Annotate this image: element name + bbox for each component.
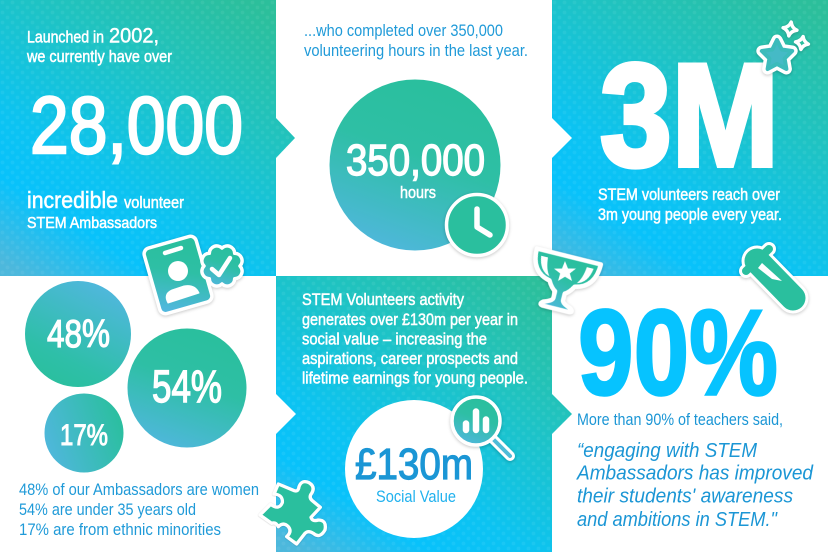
text: volunteering hours: [304, 22, 528, 60]
circle: 350,000 hours: [330, 80, 500, 250]
text: social value description: generates over £130m per year in: [302, 311, 518, 329]
icon: ID card with check badge: [143, 235, 242, 315]
panel background with arrow: [0, 0, 295, 276]
text: STEM volunteers reach: 3m young people every year.: [598, 206, 782, 224]
text: incredible volunteer STEM Ambassadors: STEM Ambassadors: [27, 215, 157, 232]
panel: social value: [260, 276, 572, 552]
text: incredible volunteer STEM Ambassadors: [27, 187, 184, 232]
panel background with notch: [552, 0, 828, 276]
big number: 28,000: 28,000: [30, 81, 243, 171]
panel: 3M young people: [552, 0, 828, 276]
quote: “engaging with STEM: [577, 439, 758, 462]
text: demographics list: 17% are from ethnic minorities: [19, 521, 221, 539]
text: incredible volunteer STEM Ambassadors: volunteer: [124, 194, 184, 212]
circle: £130m social value: £130m: [355, 440, 473, 489]
sparkle two: [794, 35, 810, 51]
panel background with arrow and notch: [276, 276, 572, 552]
circle: 48%: 48%: [47, 313, 110, 356]
panel: ambassador demographics: [19, 281, 259, 539]
heading: launched in 2002: 2002,: [109, 24, 159, 48]
text: social value description: lifetime earnings for young people.: [302, 370, 528, 388]
panel: volunteering hours: [304, 22, 528, 256]
quote: Ambassadors has improved: [575, 462, 814, 484]
circle: 54%: 54%: [152, 361, 222, 412]
text: social value description: [302, 291, 528, 388]
text: social value description: aspirations, career prospects and: [302, 350, 518, 368]
quote: [575, 439, 814, 531]
card: [143, 235, 213, 315]
text: more than 90% of teachers: More than 90% of teachers said,: [577, 410, 783, 429]
text: demographics list: 48% of our Ambassadors are women: [19, 481, 259, 499]
heading: launched in 2002: [26, 24, 172, 66]
circle: 54%: [128, 328, 246, 448]
panel: teachers 90%: [575, 249, 814, 531]
sparkle one: [782, 21, 798, 37]
quote: and ambitions in STEM.": [577, 508, 779, 531]
big number: 3M: 3M: [600, 34, 779, 196]
text: STEM volunteers reach: [598, 186, 782, 224]
text: STEM volunteers reach: STEM volunteers reach over: [598, 186, 780, 204]
text: incredible volunteer STEM Ambassadors: incredible: [27, 187, 118, 213]
badge: [202, 246, 242, 286]
circle: 17%: 17%: [60, 419, 108, 452]
text: volunteering hours: volunteering hours in the last year.: [304, 42, 528, 60]
icon: puzzle piece: [260, 482, 325, 544]
panel: volunteers count: [0, 0, 295, 276]
circle: 350,000 hours: 350,000: [346, 136, 485, 185]
icon: test tube: [746, 249, 793, 298]
heading: launched in 2002: Launched in: [27, 28, 104, 46]
icon: magnifier with bars: [452, 397, 510, 456]
circle: 17%: [44, 394, 124, 472]
quote: their students' awareness: [577, 484, 793, 508]
text: social value description: social value – increasing the: [302, 330, 487, 348]
text: social value description: STEM Volunteers activity: [302, 291, 465, 309]
star: [762, 40, 792, 69]
icon: clock: [446, 194, 508, 256]
circle: 350,000 hours: hours: [400, 184, 436, 202]
text: demographics list: [19, 481, 259, 539]
circle: £130m social value: Social Value: [376, 487, 456, 506]
text: volunteering hours: ...who completed over 350,000: [304, 22, 503, 40]
circle: 48%: [25, 281, 131, 387]
circle: £130m social value: [345, 400, 483, 538]
big number: 90%: 90%: [578, 284, 778, 420]
text: demographics list: 54% are under 35 years old: [19, 501, 196, 519]
heading: launched in 2002: we currently have over: [26, 48, 172, 66]
icon: star with sparkles: [762, 21, 810, 69]
icon: trophy: [524, 248, 601, 317]
